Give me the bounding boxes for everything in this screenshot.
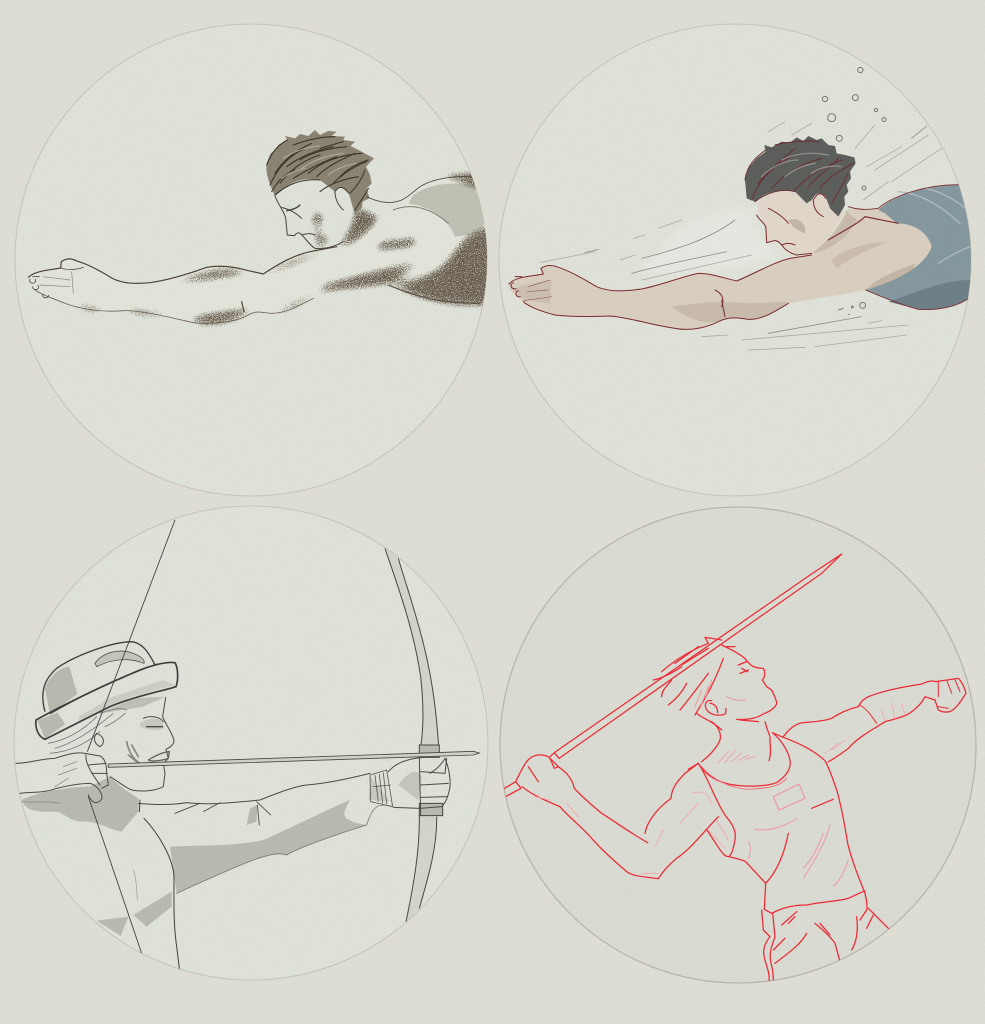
swimmer face skin (757, 187, 845, 255)
bow string (87, 520, 175, 953)
bow hand (388, 757, 450, 815)
swimmer contour lines (509, 185, 970, 329)
hat band line (50, 664, 157, 714)
shorts (762, 893, 888, 982)
archer grey shadows (22, 667, 422, 936)
swimmer face lines (275, 177, 475, 249)
hat crown (43, 642, 155, 712)
wrist cuff (370, 770, 393, 807)
arrow (108, 751, 479, 767)
figure: archer (16, 520, 479, 968)
javelin arm (516, 755, 718, 879)
swimmer hair (745, 136, 856, 217)
javelin (502, 554, 842, 797)
drawing hand and back arm (16, 753, 108, 803)
water speed lines (540, 122, 942, 350)
hair strands (745, 141, 853, 203)
athlete head (702, 645, 777, 762)
swimmer arm and torso skin (472, 178, 487, 300)
arm contour lines (28, 247, 480, 323)
throwing arm (783, 678, 966, 762)
panel: javelin thrower (500, 507, 976, 983)
front arm and sleeve (133, 773, 393, 968)
air bubbles (822, 67, 886, 315)
archer face and hair (48, 697, 174, 791)
swimmer vest (866, 184, 971, 300)
swimmer body skin (509, 198, 932, 329)
vest flat grey area (408, 183, 487, 237)
archer hat (36, 642, 178, 739)
figure: javelin thrower (502, 554, 966, 982)
stipple shading (63, 170, 497, 327)
hat crease (95, 651, 144, 667)
pale water wash behind swimmer (653, 214, 764, 268)
hat brim (36, 662, 178, 739)
panel: stippled swimmer (15, 24, 497, 496)
panel: archer (14, 506, 488, 980)
athlete hair (653, 637, 735, 730)
swimmer hair (266, 130, 374, 215)
skin shadows (513, 210, 915, 322)
hair strands (267, 137, 368, 210)
figure: coloured swimmer (509, 67, 985, 350)
circle disc: coloured swimmer (499, 24, 971, 496)
bow limbs (385, 548, 443, 922)
tank top (688, 733, 865, 913)
circle disc: stippled swimmer (15, 24, 487, 496)
figure: stippled swimmer (28, 130, 497, 327)
vest shadow and highlights (888, 188, 970, 310)
circle disc: javelin thrower (500, 507, 976, 983)
circle disc: archer (14, 506, 488, 980)
panel: coloured swimmer (499, 24, 985, 496)
